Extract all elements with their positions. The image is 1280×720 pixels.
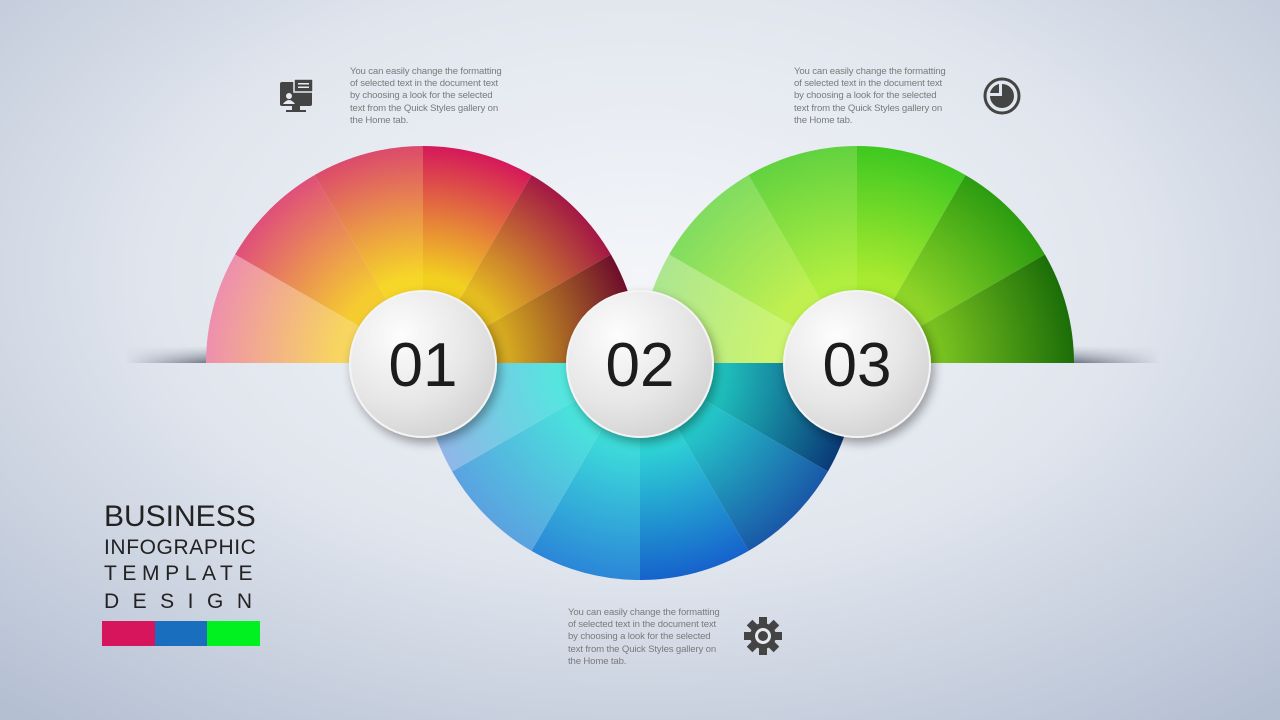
icon: monitor with user <box>280 79 313 112</box>
title: INFOGRAPHIC <box>104 536 256 559</box>
text block: top left: of selected text in the document text <box>350 78 498 89</box>
text block: top left: text from the Quick Styles gallery on <box>350 103 498 114</box>
number badge 03: 03 <box>823 331 891 400</box>
number badge 03 <box>784 291 930 437</box>
text block: top left: by choosing a look for the selected <box>350 90 492 101</box>
text block: top right: text from the Quick Styles gallery on <box>794 103 942 114</box>
text block: top right: the Home tab. <box>794 115 852 126</box>
number badge 01: 01 <box>389 331 457 400</box>
text block: bottom: of selected text in the document text <box>568 619 716 630</box>
number badge 02: 02 <box>606 331 674 400</box>
title: TEMPLATE <box>104 562 258 585</box>
number badge 01 <box>350 291 496 437</box>
color bar <box>102 621 260 646</box>
text block: top right: of selected text in the document text <box>794 78 942 89</box>
title <box>104 500 266 613</box>
text block: bottom: You can easily change the formatting <box>568 607 720 618</box>
number badge 02 <box>567 291 713 437</box>
semicircle: middle (02) <box>423 363 857 580</box>
text block: bottom <box>568 607 720 667</box>
text block: top right <box>794 66 946 126</box>
text block: bottom: by choosing a look for the selected <box>568 631 710 642</box>
text block: top right: by choosing a look for the selected <box>794 90 936 101</box>
text block: bottom: text from the Quick Styles gallery on <box>568 644 716 655</box>
text block: bottom: the Home tab. <box>568 656 626 667</box>
text block: top left: the Home tab. <box>350 115 408 126</box>
icon: gear <box>736 609 790 663</box>
icon: pie chart <box>985 79 1019 113</box>
semicircle: left (01) <box>206 146 640 363</box>
semicircle: right (03) <box>640 146 1074 363</box>
text block: top right: You can easily change the formatting <box>794 66 946 77</box>
title: BUSINESS <box>104 500 256 533</box>
text block: top left <box>350 66 502 126</box>
main diagram <box>131 78 1154 655</box>
text block: top left: You can easily change the formatting <box>350 66 502 77</box>
shadow line <box>125 346 1160 363</box>
title: DESIGN <box>104 590 266 613</box>
